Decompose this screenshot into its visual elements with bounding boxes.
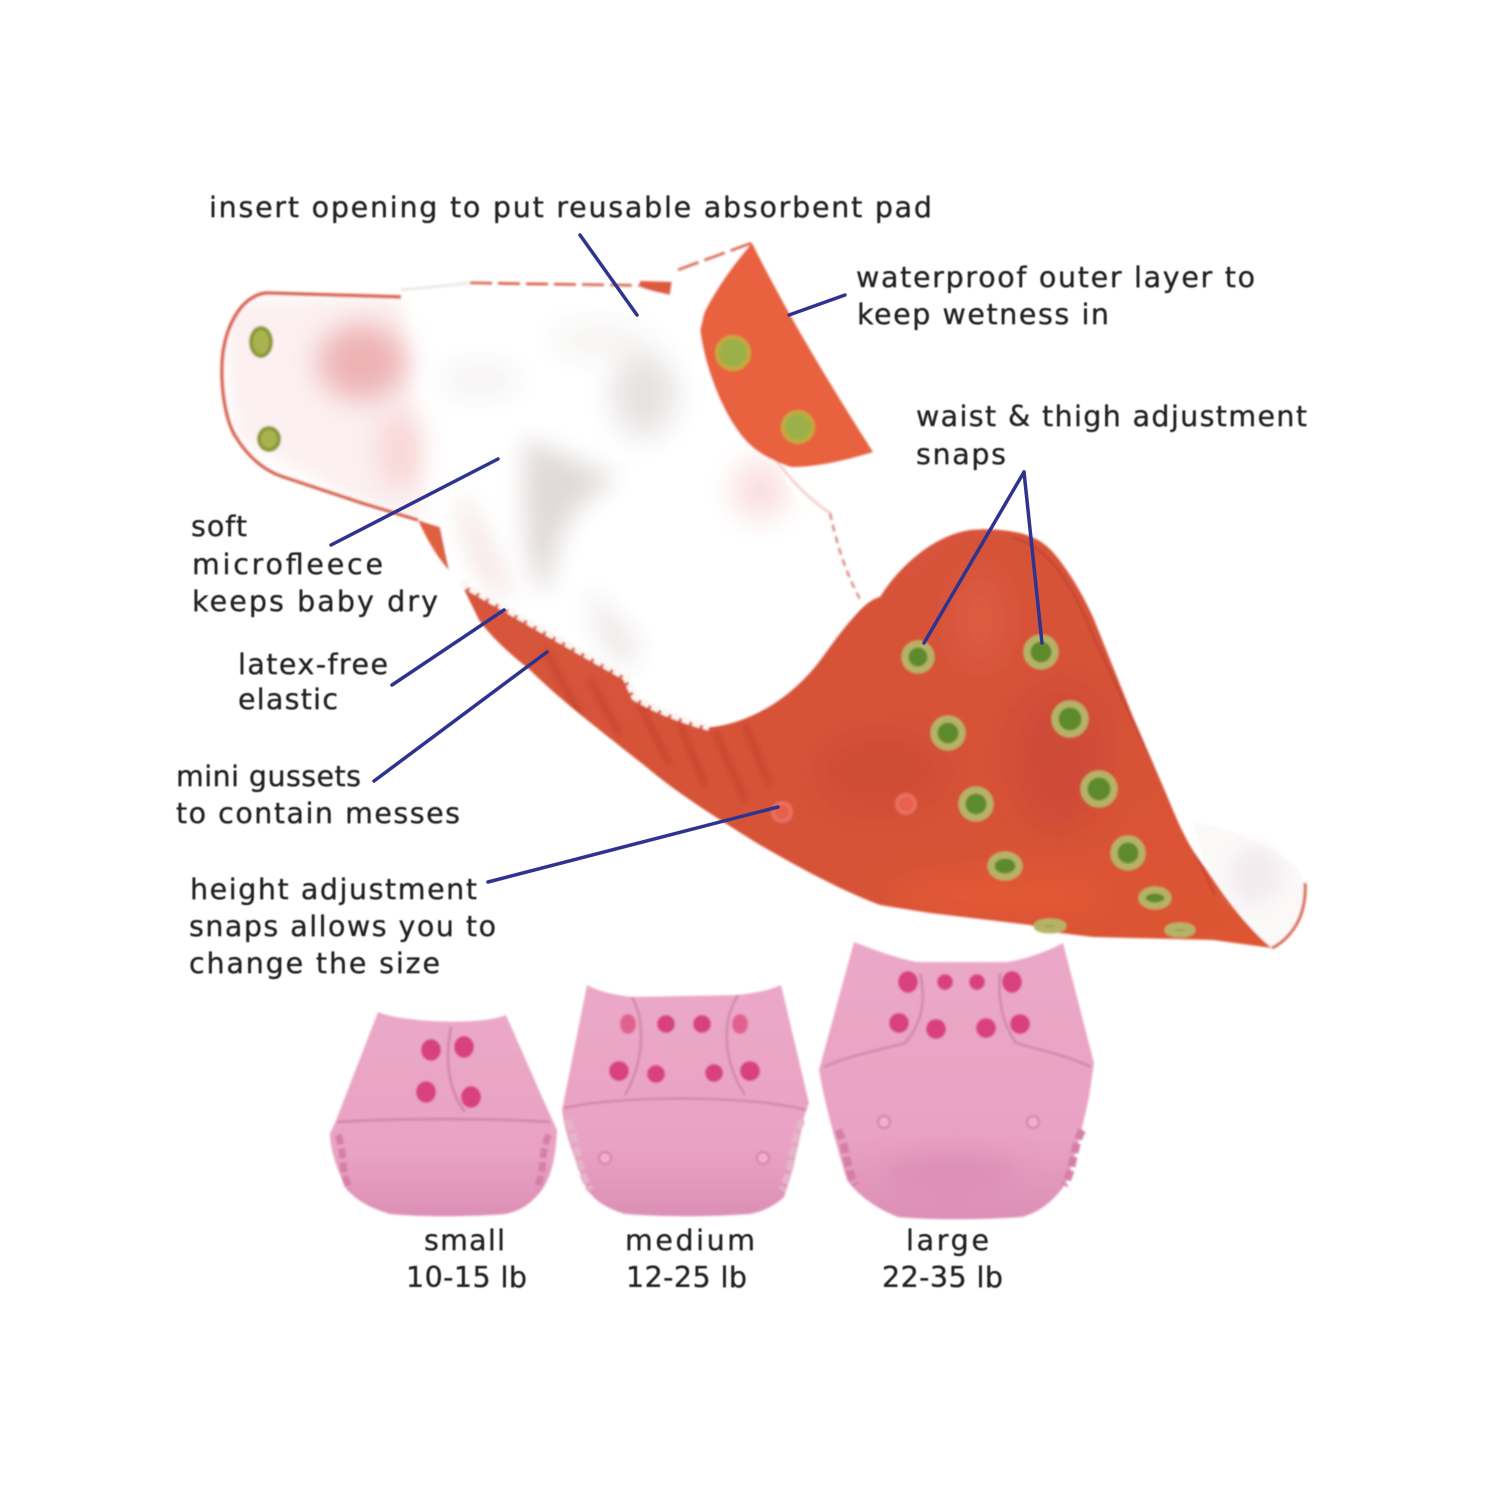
labels (176, 191, 1307, 1294)
white corner of lower wing (1193, 823, 1305, 948)
label: elastic: elastic (238, 683, 338, 716)
label: snaps: snaps (916, 438, 1006, 471)
white elastic edge (461, 583, 709, 727)
orange panel mottling and folds (545, 538, 1215, 917)
corner orange piping (1272, 883, 1305, 948)
label: waterproof outer layer (856, 261, 1255, 331)
orange front flap (700, 243, 873, 467)
label: height adjustment (189, 873, 496, 980)
fleece shading (222, 297, 788, 670)
callout lines (331, 235, 1042, 882)
large diaper leg gathers (838, 1130, 1082, 1185)
top orange patch (640, 281, 672, 295)
label: gussets (176, 760, 460, 830)
label: elastic: latex-free (238, 648, 388, 681)
label: height adjustment: height adjustment (190, 873, 477, 906)
label: medium size: 12-25 lb (626, 1261, 747, 1294)
small diaper leg gathers (338, 1135, 549, 1190)
label: waterproof outer layer: waterproof outer layer to (856, 261, 1255, 294)
right edge stitches (830, 513, 862, 603)
label: microfleece: soft (191, 510, 247, 543)
medium diaper leg gathers (568, 1120, 802, 1190)
waist and thigh snaps (905, 638, 1192, 934)
label: microfleece: keeps baby dry (192, 585, 438, 618)
small diaper details (337, 1027, 550, 1122)
label: small size: small (424, 1224, 505, 1257)
small diaper (330, 1012, 557, 1216)
label: gussets: to contain messes (176, 797, 460, 830)
label: medium size (625, 1224, 755, 1294)
orange outer back panel (461, 529, 1272, 948)
diaper inner fleece body (222, 243, 862, 727)
large diaper details (824, 973, 1091, 1067)
label: elastic (238, 648, 388, 716)
corner shading (1229, 847, 1281, 903)
label: microfleece: microfleece (192, 548, 383, 581)
label: insert opening: insert opening to put reusable absorbent pad (209, 191, 932, 224)
label: small size (406, 1224, 527, 1294)
label: height adjustment: change the size (189, 947, 440, 980)
label: large size: 22-35 lb (882, 1261, 1003, 1294)
large diaper (819, 942, 1094, 1219)
main diaper illustration (222, 243, 1305, 948)
medium diaper (562, 985, 809, 1216)
label: snaps: waist & thigh adjustment (916, 400, 1307, 433)
label: microfleece (191, 510, 438, 618)
left orange tip (418, 520, 449, 570)
label: large size (882, 1224, 1003, 1294)
label: waterproof outer layer: keep wetness in (857, 298, 1109, 331)
label: small size: 10-15 lb (406, 1261, 527, 1294)
label: gussets: mini gussets (176, 760, 361, 793)
fleece panel edge (401, 283, 470, 290)
label: snaps (916, 400, 1307, 471)
label: medium size: medium (625, 1224, 755, 1257)
snaps on flap and tab (251, 328, 813, 450)
medium diaper details (564, 995, 806, 1110)
label: height adjustment: snaps allows you to (189, 910, 496, 943)
top edge piping (470, 243, 752, 286)
left tab orange piping (222, 293, 418, 520)
label: large size: large (906, 1224, 989, 1257)
height adjustment snaps (773, 795, 915, 821)
